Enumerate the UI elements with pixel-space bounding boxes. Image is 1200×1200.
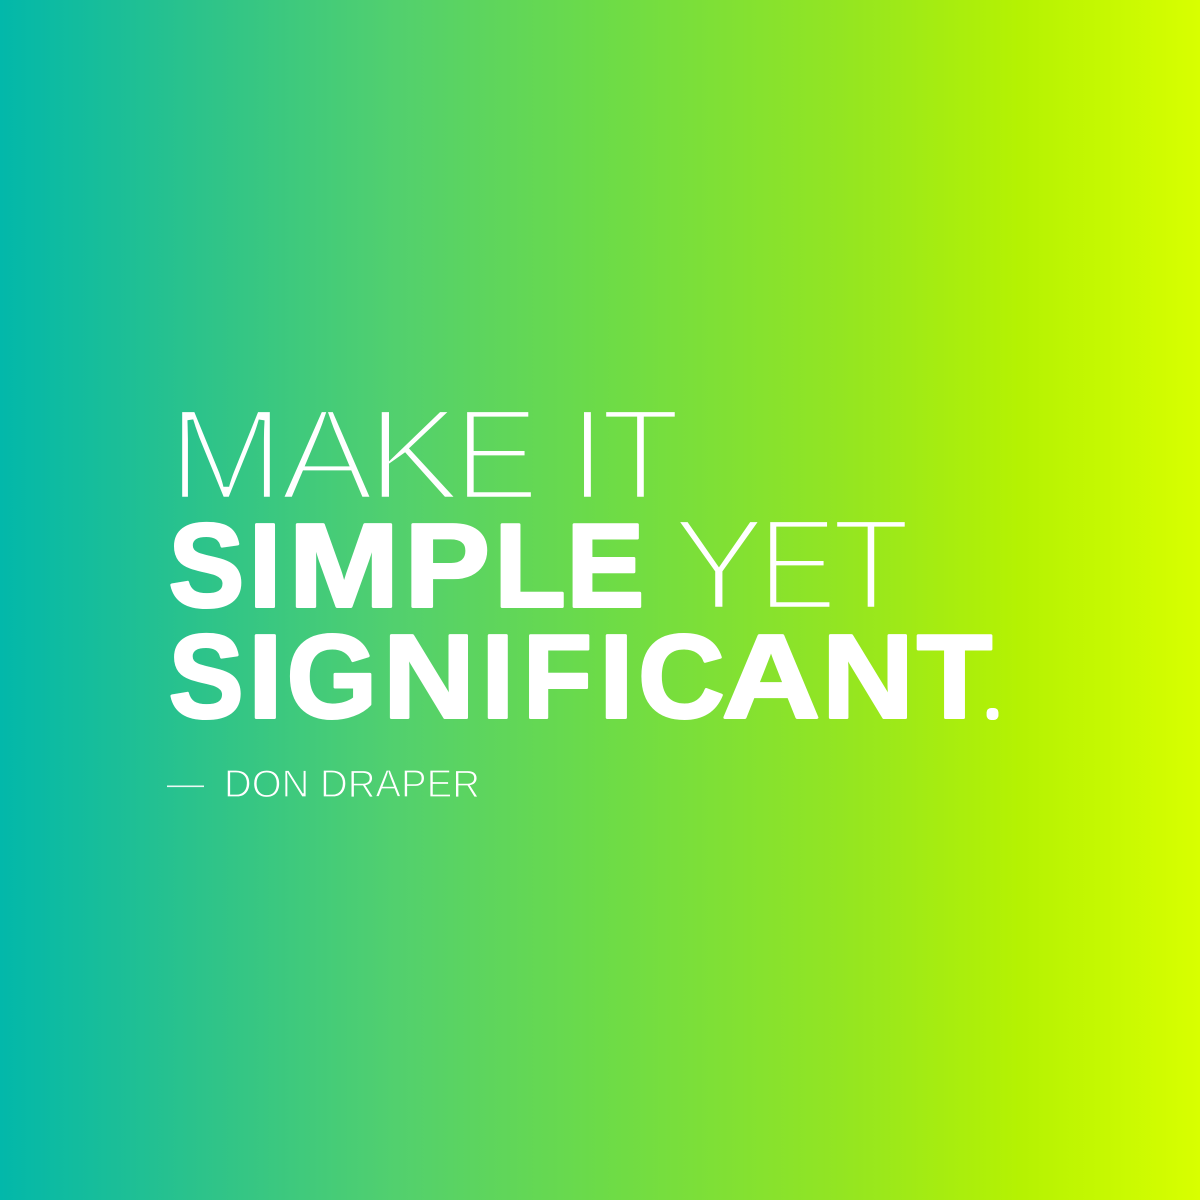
line two: YET: E — [758, 490, 837, 638]
line two: SIMPLE: I — [249, 500, 281, 632]
attribution name: DON DRAPER — [224, 763, 480, 806]
line one: MAKE IT: T — [600, 380, 680, 528]
line three: SIGNIFICANT.: F — [523, 610, 592, 744]
line three: SIGNIFICANT.: N — [822, 610, 914, 744]
line three: SIGNIFICANT.: . — [990, 698, 995, 720]
line one: MAKE IT: K — [367, 380, 462, 528]
line one: MAKE IT: M — [168, 380, 284, 528]
attribution dash — [167, 786, 204, 787]
line three: SIGNIFICANT.: G — [287, 610, 377, 744]
line three: SIGNIFICANT.: T — [917, 610, 992, 744]
line two: SIMPLE: M — [289, 500, 399, 632]
line two: SIMPLE: L — [494, 500, 566, 632]
line two: YET: Y — [672, 490, 766, 638]
line three: SIGNIFICANT.: I — [481, 610, 514, 744]
line two: SIMPLE: E — [566, 500, 644, 632]
line two: YET: T — [832, 490, 910, 638]
line three: SIGNIFICANT.: S — [169, 610, 244, 744]
line three: SIGNIFICANT.: A — [722, 610, 820, 744]
line three: SIGNIFICANT.: C — [638, 610, 725, 744]
line one: MAKE IT: E — [454, 380, 539, 528]
line two: SIMPLE: S — [168, 500, 244, 632]
line one: MAKE IT: I — [569, 380, 606, 528]
line one: MAKE IT: A — [280, 380, 375, 528]
line three: SIGNIFICANT.: I — [248, 610, 283, 744]
line two: SIMPLE: P — [404, 500, 490, 632]
quote text — [168, 380, 995, 744]
line three: SIGNIFICANT.: I — [599, 610, 634, 744]
line three: SIGNIFICANT.: N — [383, 610, 475, 744]
